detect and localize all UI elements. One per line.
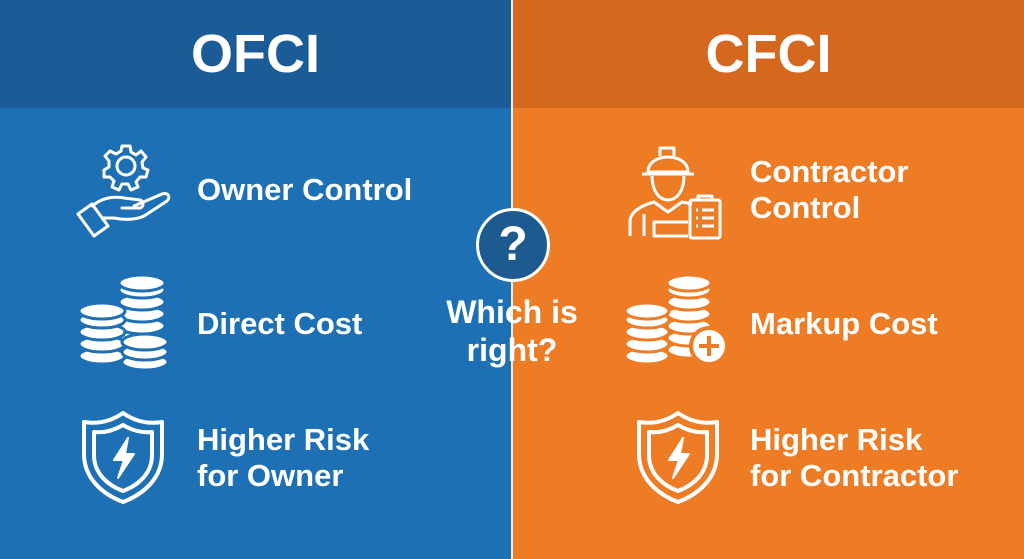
text: Direct Cost: Direct Cost — [197, 306, 362, 341]
icon: coins with plus — [626, 276, 725, 362]
icon: shield left — [82, 411, 164, 504]
icon: coins — [80, 276, 166, 368]
panel: CFCI right — [513, 0, 1024, 559]
text: Which is right?: Which is — [446, 294, 578, 330]
header: CFCI — [513, 0, 1024, 108]
text: Owner Control: Owner Control — [197, 172, 412, 207]
text: Higher Risk for Owner — [197, 422, 370, 493]
icon: gear on hand — [76, 144, 170, 238]
text: Markup Cost: Markup Cost — [750, 306, 938, 341]
text: Higher Risk for Owner: Higher Risk — [197, 422, 369, 457]
text: Higher Risk for Contractor — [750, 422, 958, 493]
text: Which is right? — [446, 294, 578, 368]
text: Contractor Control — [750, 154, 908, 225]
header: CFCI: CFCI — [706, 24, 831, 84]
text: Contractor Control: Control — [750, 190, 860, 225]
text: Higher Risk for Contractor: Higher Risk — [750, 422, 922, 457]
text: Contractor Control: Contractor — [750, 154, 908, 189]
icon: question mark circle: ? — [498, 218, 528, 271]
panel: OFCI left — [0, 0, 511, 559]
text: Higher Risk for Contractor: for Contractor — [750, 458, 958, 493]
header: OFCI — [0, 0, 511, 108]
text: Higher Risk for Owner: for Owner — [197, 458, 343, 493]
icon: question mark circle — [476, 208, 550, 282]
icon: shield right — [637, 411, 719, 504]
header: OFCI: OFCI — [191, 24, 320, 84]
text: Which is right?: right? — [467, 332, 557, 368]
icon: worker with clipboard — [628, 146, 722, 240]
